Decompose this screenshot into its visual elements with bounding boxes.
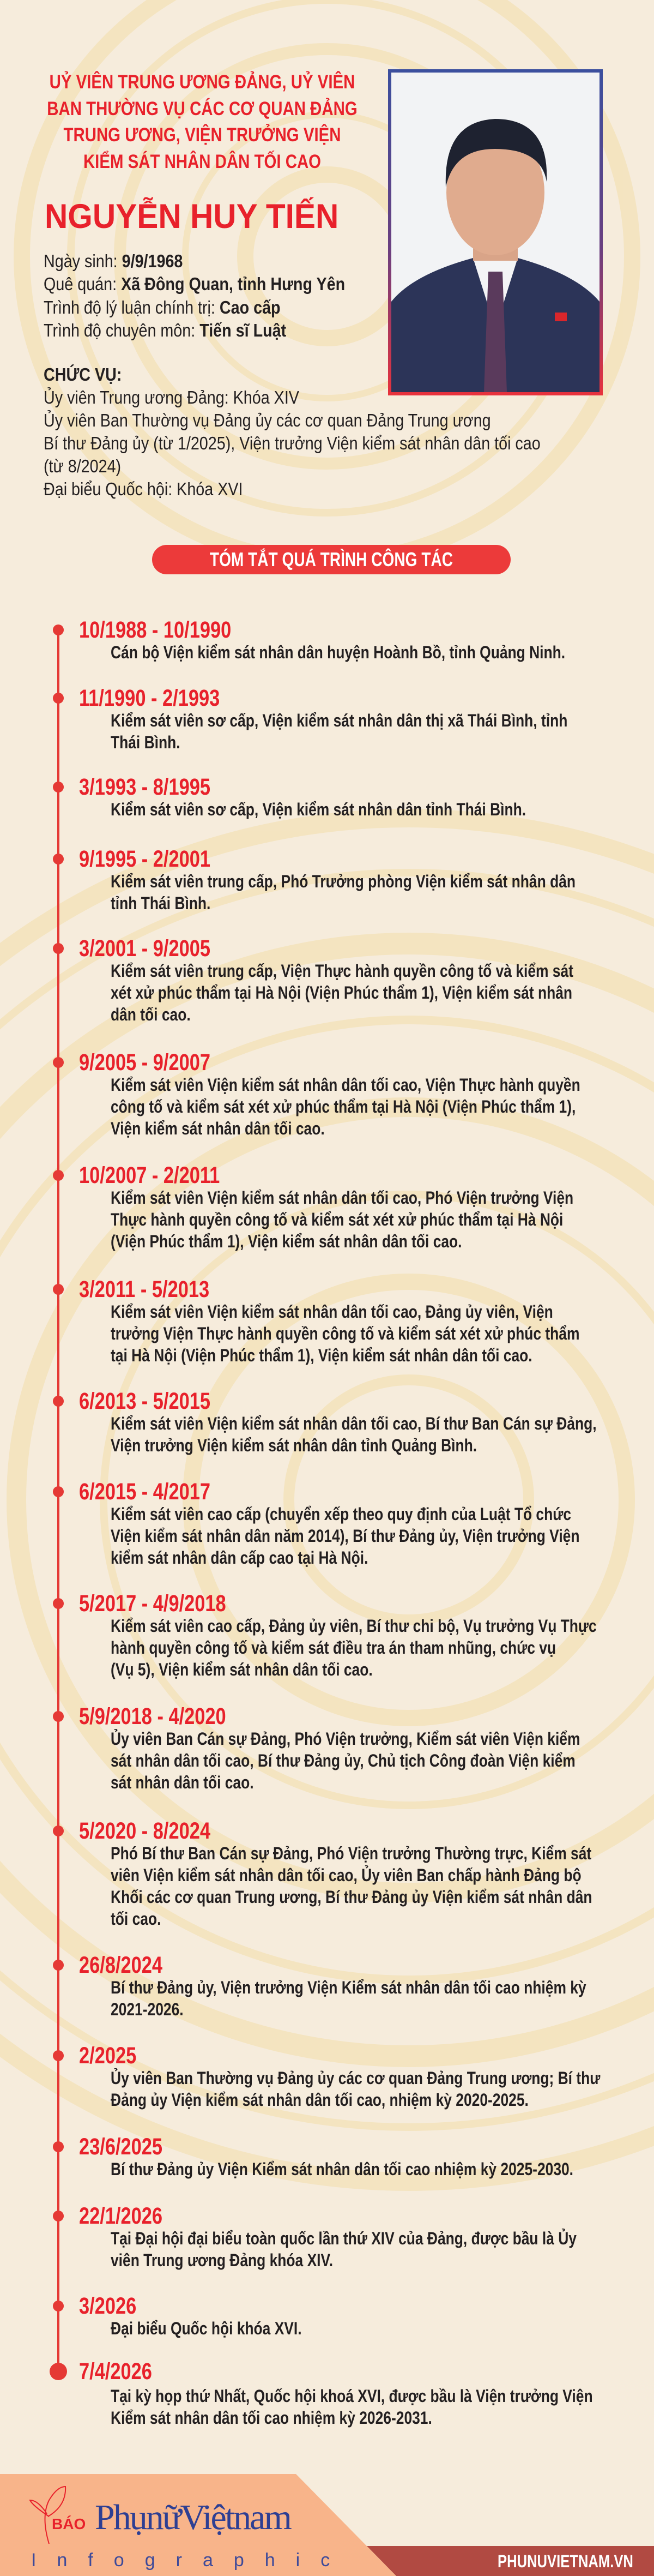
entry 13: Phó Bí thư Ban Cán sự Đảng, Phó Viện trưởng Thường trực, Kiểm sát bbox=[111, 1844, 591, 1863]
entry 14: Bí thư Đảng ủy, Viện trưởng Viện Kiểm sát nhân dân tối cao nhiệm kỳ bbox=[111, 1978, 586, 1997]
entry 5: Kiểm sát viên trung cấp, Viện Thực hành quyền công tố và kiểm sát bbox=[111, 961, 573, 981]
name: NGUYỄN HUY TIẾN bbox=[45, 197, 338, 236]
entry 9: Viện trưởng Viện kiểm sát nhân dân tỉnh Quảng Bình. bbox=[111, 1436, 477, 1455]
personal info: Trình độ lý luận chính trị: Cao cấp bbox=[44, 297, 281, 317]
title: KIỂM SÁT NHÂN DÂN TỐI CAO bbox=[83, 151, 321, 172]
entry 4: Kiểm sát viên trung cấp, Phó Trưởng phòng Viện kiểm sát nhân dân bbox=[111, 872, 576, 891]
entry 10: 6/2015 - 4/2017 bbox=[79, 1479, 210, 1505]
entry 6: 9/2005 - 9/2007 bbox=[79, 1049, 210, 1076]
entry 15: 2/2025 bbox=[79, 2043, 136, 2069]
entry 5: dân tối cao. bbox=[111, 1005, 191, 1024]
entry 1: Cán bộ Viện kiểm sát nhân dân huyện Hoành Bồ, tỉnh Quảng Ninh. bbox=[111, 643, 565, 662]
timeline line bbox=[57, 630, 59, 2371]
entry 6: Kiểm sát viên Viện kiểm sát nhân dân tối cao, Viện Thực hành quyền bbox=[111, 1075, 580, 1095]
entry 9 bbox=[53, 1388, 597, 1455]
personal info bbox=[44, 251, 345, 340]
entry 8: trưởng Viện Thực hành quyền công tố và kiểm sát xét xử phúc thẩm bbox=[111, 1324, 579, 1343]
entry 12: Ủy viên Ban Cán sự Đảng, Phó Viện trưởng, Kiểm sát viên Viện kiểm bbox=[111, 1729, 580, 1749]
entry 14 bbox=[53, 1952, 586, 2019]
entry 16 bbox=[53, 2134, 573, 2179]
entry 4: tỉnh Thái Bình. bbox=[111, 893, 210, 913]
entry 7 bbox=[53, 1162, 573, 1251]
entry 17 bbox=[53, 2203, 577, 2270]
entry 11: Kiểm sát viên cao cấp, Đảng ủy viên, Bí thư chi bộ, Vụ trưởng Vụ Thực bbox=[111, 1616, 597, 1636]
positions: Ủy viên Trung ương Đảng: Khóa XIV bbox=[44, 387, 299, 407]
entry 16: 23/6/2025 bbox=[79, 2134, 162, 2160]
entry 3: Kiểm sát viên sơ cấp, Viện kiểm sát nhân dân tỉnh Thái Bình. bbox=[111, 800, 526, 819]
title: BAN THƯỜNG VỤ CÁC CƠ QUAN ĐẢNG bbox=[47, 98, 358, 119]
entry 11: (Vụ 5), Viện kiểm sát nhân dân tối cao. bbox=[111, 1660, 373, 1679]
entry 10: Viện kiểm sát nhân dân năm 2014), Bí thư Đảng ủy, Viện trưởng Viện bbox=[111, 1526, 579, 1546]
entry 7: (Viện Phúc thẩm 1), Viện kiểm sát nhân dân tối cao. bbox=[111, 1232, 462, 1251]
title bbox=[47, 71, 358, 172]
entry 3 bbox=[53, 774, 526, 819]
entry 7: 10/2007 - 2/2011 bbox=[79, 1162, 220, 1188]
positions: Ủy viên Ban Thường vụ Đảng ủy các cơ quan Đảng Trung ương bbox=[44, 410, 491, 430]
entry 18 bbox=[53, 2293, 302, 2338]
entry 11 bbox=[53, 1590, 597, 1679]
entry 8: tại Hà Nội (Viện Phúc thẩm 1), Viện kiểm sát nhân dân tối cao. bbox=[111, 1346, 532, 1365]
entry 9: Kiểm sát viên Viện kiểm sát nhân dân tối cao, Bí thư Ban Cán sự Đảng, bbox=[111, 1414, 597, 1433]
entry 19: Tại kỳ họp thứ Nhất, Quốc hội khoá XVI, được bầu là Viện trưởng Viện bbox=[111, 2386, 593, 2406]
entry 19: 7/4/2026 bbox=[79, 2358, 152, 2385]
entry 10 bbox=[53, 1479, 579, 1568]
entry 2: Thái Bình. bbox=[111, 732, 180, 752]
entry 2 bbox=[53, 685, 567, 752]
entry 14: 26/8/2024 bbox=[79, 1952, 162, 1978]
personal info: Quê quán: Xã Đông Quan, tỉnh Hưng Yên bbox=[44, 274, 345, 294]
entry 7: Thực hành quyền công tố và kiểm sát xét xử phúc thẩm tại Hà Nội bbox=[111, 1210, 563, 1229]
entry 12: sát nhân dân tối cao, Bí thư Đảng ủy, Chủ tịch Công đoàn Viện kiểm bbox=[111, 1751, 576, 1770]
entry 19: Kiểm sát nhân dân tối cao nhiệm kỳ 2026-2031. bbox=[111, 2408, 432, 2428]
entry 14: 2021-2026. bbox=[111, 1999, 184, 2019]
entry 5 bbox=[53, 935, 573, 1024]
infographic label: Infographic bbox=[31, 2550, 350, 2571]
positions: CHỨC VỤ: bbox=[44, 364, 122, 385]
entry 6 bbox=[53, 1049, 580, 1138]
entry 4: 9/1995 - 2/2001 bbox=[79, 846, 210, 872]
entry 13: 5/2020 - 8/2024 bbox=[79, 1818, 210, 1844]
entry 17: Tại Đại hội đại biểu toàn quốc lần thứ XIV của Đảng, được bầu là Ủy bbox=[111, 2229, 577, 2248]
positions bbox=[44, 364, 541, 499]
footer bbox=[0, 2474, 654, 2576]
entry 18: 3/2026 bbox=[79, 2293, 136, 2319]
entry 16: Bí thư Đảng ủy Viện Kiểm sát nhân dân tối cao nhiệm kỳ 2025-2030. bbox=[111, 2159, 573, 2179]
entry 7: Kiểm sát viên Viện kiểm sát nhân dân tối cao, Phó Viện trưởng Viện bbox=[111, 1188, 573, 1208]
personal info: Ngày sinh: 9/9/1968 bbox=[44, 251, 183, 271]
entry 2: Kiểm sát viên sơ cấp, Viện kiểm sát nhân dân thị xã Thái Bình, tỉnh bbox=[111, 711, 567, 730]
personal info: Trình độ chuyên môn: Tiến sĩ Luật bbox=[44, 320, 286, 340]
entry 5: xét xử phúc thẩm tại Hà Nội (Viện Phúc thẩm 1), Viện kiểm sát nhân bbox=[111, 983, 572, 1002]
logo: PhụnữViệtnam bbox=[95, 2497, 290, 2537]
entry 3: 3/1993 - 8/1995 bbox=[79, 774, 210, 800]
entry 1 bbox=[53, 617, 565, 662]
entry 11: 5/2017 - 4/9/2018 bbox=[79, 1590, 226, 1617]
entry 10: Kiểm sát viên cao cấp (chuyển xếp theo quy định của Luật Tổ chức bbox=[111, 1504, 571, 1524]
entry 13: tối cao. bbox=[111, 1909, 161, 1929]
title: UỶ VIÊN TRUNG ƯƠNG ĐẢNG, UỶ VIÊN bbox=[50, 71, 355, 93]
entry 13: viên Viện kiểm sát nhân dân tối cao, Ủy viên Ban chấp hành Đảng bộ bbox=[111, 1865, 582, 1885]
entry 1: 10/1988 - 10/1990 bbox=[79, 617, 231, 643]
entry 17: 22/1/2026 bbox=[79, 2203, 162, 2229]
logo: BÁO bbox=[52, 2515, 86, 2532]
portrait photo bbox=[388, 69, 603, 395]
section banner bbox=[152, 545, 511, 574]
logo bbox=[29, 2486, 292, 2544]
entry 6: công tố và kiểm sát xét xử phúc thẩm tại Hà Nội (Viện Phúc thẩm 1), bbox=[111, 1097, 576, 1116]
entry 4 bbox=[53, 846, 576, 913]
entry 15: Ủy viên Ban Thường vụ Đảng ủy các cơ quan Đảng Trung ương; Bí thư bbox=[111, 2068, 600, 2088]
entry 18: Đại biểu Quốc hội khóa XVI. bbox=[111, 2319, 302, 2338]
entry 15: Đảng ủy Viện kiểm sát nhân dân tối cao, nhiệm kỳ 2020-2025. bbox=[111, 2090, 529, 2110]
section banner: TÓM TẮT QUÁ TRÌNH CÔNG TÁC bbox=[210, 548, 453, 571]
entry 8 bbox=[53, 1276, 579, 1365]
title: TRUNG ƯƠNG, VIỆN TRƯỞNG VIỆN bbox=[64, 124, 341, 146]
entry 6: Viện kiểm sát nhân dân tối cao. bbox=[111, 1119, 325, 1138]
positions: (từ 8/2024) bbox=[44, 456, 121, 476]
entry 17: viên Trung ương Đảng khóa XIV. bbox=[111, 2250, 333, 2270]
entry 19 bbox=[50, 2358, 593, 2428]
positions: Đại biểu Quốc hội: Khóa XVI bbox=[44, 479, 243, 499]
timeline bbox=[57, 635, 59, 2363]
entry 5: 3/2001 - 9/2005 bbox=[79, 935, 210, 962]
entry 12 bbox=[53, 1703, 580, 1792]
entry 13 bbox=[53, 1818, 592, 1929]
entry 9: 6/2013 - 5/2015 bbox=[79, 1388, 210, 1414]
entry 15 bbox=[53, 2043, 601, 2110]
entry 11: hành quyền công tố và kiểm sát điều tra án tham nhũng, chức vụ bbox=[111, 1638, 556, 1658]
entry 10: kiểm sát nhân dân cấp cao tại Hà Nội. bbox=[111, 1548, 368, 1568]
entry 12: sát nhân dân tối cao. bbox=[111, 1773, 254, 1792]
entry 8: Kiểm sát viên Viện kiểm sát nhân dân tối cao, Đảng ủy viên, Viện bbox=[111, 1302, 553, 1322]
entry 13: Khối các cơ quan Trung ương, Bí thư Đảng ủy Viện kiểm sát nhân dân bbox=[111, 1887, 592, 1907]
entry 2: 11/1990 - 2/1993 bbox=[79, 685, 220, 711]
entry 8: 3/2011 - 5/2013 bbox=[79, 1276, 209, 1302]
website: PHUNUVIETNAM.VN bbox=[498, 2551, 633, 2571]
positions: Bí thư Đảng ủy (từ 1/2025), Viện trưởng Viện kiểm sát nhân dân tối cao bbox=[44, 433, 541, 453]
entry 12: 5/9/2018 - 4/2020 bbox=[79, 1703, 226, 1730]
